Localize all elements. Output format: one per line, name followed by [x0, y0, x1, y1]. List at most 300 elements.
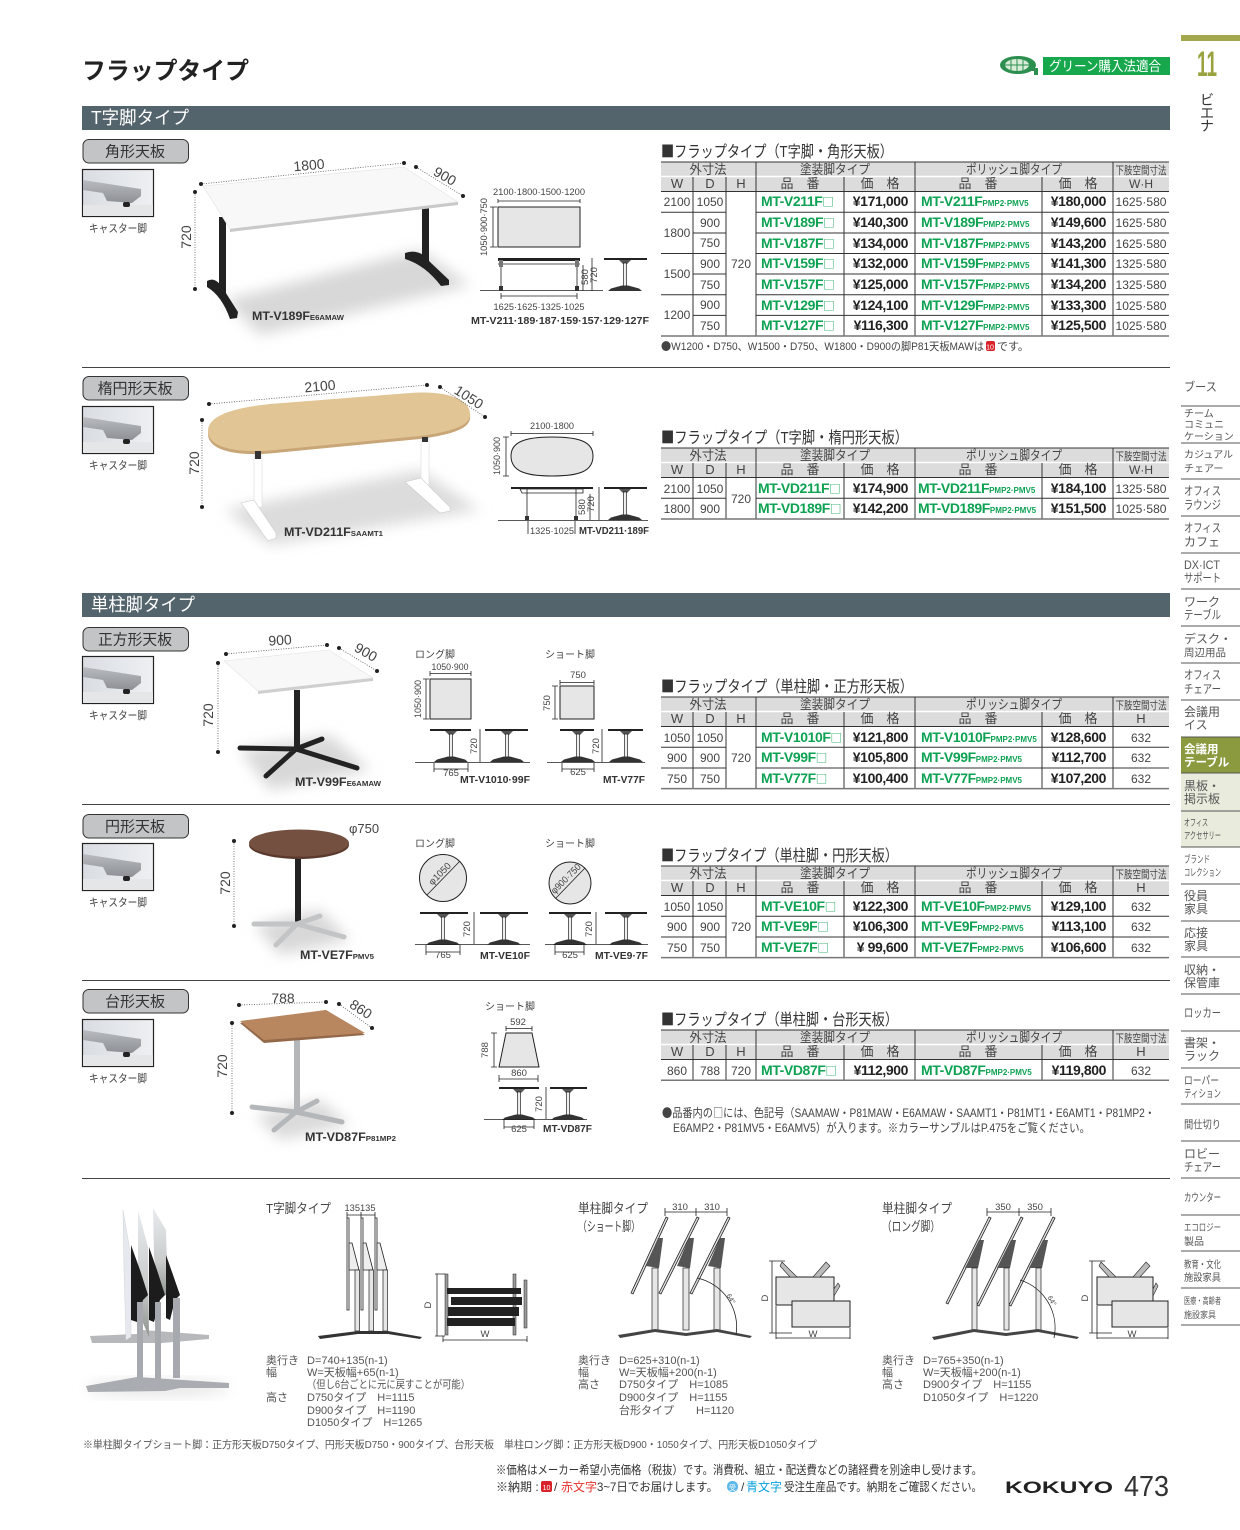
price table: single post square: MT-V1010FPMP2·PMV5 [921, 729, 1037, 745]
product code: MT-VE7F PMV5 [300, 948, 374, 962]
price table: T-leg rectangular: 1625·580 [1116, 237, 1167, 251]
price table: single post round: 品 番 [958, 880, 998, 895]
icon: caster leg thumbnail [82, 844, 154, 909]
price table: T-leg rectangular: 1050 [697, 195, 724, 209]
price table: single post round: ¥106,600 [1051, 939, 1107, 955]
price table: T-leg rectangular: MT-V189F□ [761, 214, 834, 231]
price table: single post round: ¥122,300 [853, 898, 909, 914]
sidebar category navigation [1181, 379, 1240, 1325]
sidebar category navigation: カジュアル [1184, 449, 1233, 461]
technical drawing: square long leg: 720 [469, 738, 480, 754]
icon: caster leg thumbnail [82, 406, 154, 472]
technical drawing: trapezoid short leg: 720 [534, 1096, 545, 1112]
price table: single post square: 価 格 [860, 711, 900, 726]
sidebar category navigation: ロッカー [1184, 1006, 1221, 1020]
stacking specs: T-leg type: W=天板幅+65(n-1) [307, 1365, 399, 1379]
sidebar category navigation: ティション [1184, 1088, 1221, 1100]
dimension: 900 width [224, 631, 329, 656]
technical drawing: trapezoid short leg: 592 [510, 1017, 526, 1028]
sidebar category navigation: チーム [1184, 408, 1214, 420]
dimension: 788: 788 [271, 990, 295, 1006]
section heading: T-leg type: T字脚タイプ [91, 108, 189, 128]
price table: T-leg boat-shaped: W·H [1129, 463, 1153, 477]
price table: T-leg rectangular: 750 [700, 278, 720, 292]
sidebar category navigation: ブランド [1184, 853, 1210, 866]
dimension: 900 width: 900 [268, 631, 292, 649]
chapter index tab: ビ [1200, 92, 1214, 108]
price table: single post round: 750 [700, 941, 720, 955]
price table: T-leg rectangular: ¥149,600 [1051, 214, 1107, 230]
technical drawing: round short leg: 625 [562, 950, 578, 961]
price and delivery notes: ※価格はメーカー希望小売価格（税抜）です。消費税、組立・配送費などの諸経費を別途申し受けます。 [496, 1462, 982, 1477]
shape tag: trapezoid top [83, 990, 188, 1013]
sidebar category navigation: カフェ [1184, 535, 1220, 549]
sidebar category navigation: イス [1184, 718, 1208, 732]
stacking specs: single post long leg: D=765+350(n-1) [923, 1355, 1004, 1367]
price table: T-leg rectangular: MT-V129FPMP2·PMV5 [921, 297, 1030, 313]
price table: T-leg boat-shaped: 1050 [697, 482, 724, 496]
icon: caster leg thumbnail: キャスター脚 [89, 458, 147, 472]
price table: T-leg rectangular: MT-V129F□ [761, 297, 834, 314]
price and delivery notes: 10 [543, 1485, 550, 1492]
price table: T-leg rectangular: ■フラップタイプ（T字脚・角形天板） [661, 138, 893, 162]
price table: single post round: 632 [1131, 900, 1151, 914]
product illustration: MT-VD211F table [186, 377, 487, 545]
sidebar category navigation: 会議用 [1184, 705, 1220, 719]
price table: single post square: 1050 [697, 731, 724, 745]
technical drawing: round long leg: 720 [462, 921, 473, 937]
price table: single post square: ポリッシュ脚タイプ [966, 697, 1062, 712]
price table: T-leg rectangular: 750 [700, 319, 720, 333]
price table: single post round: 632 [1131, 920, 1151, 934]
shape tag: round top [83, 814, 188, 838]
price table: single post square: MT-V99FPMP2·PMV5 [921, 749, 1023, 765]
sidebar category navigation: 応接 [1184, 925, 1208, 940]
dimension: 720: 720 [214, 1054, 230, 1078]
price table: T-leg rectangular: ポリッシュ脚タイプ [966, 162, 1062, 177]
price table: T-leg boat-shaped: ■フラップタイプ（T字脚・楕円形天板） [661, 424, 908, 448]
price and delivery notes: 受 [729, 1483, 736, 1492]
price table: T-leg rectangular: 1325·580 [1116, 278, 1167, 292]
product illustration: MT-VE7F table [217, 821, 379, 962]
shape tag: square top: 正方形天板 [98, 632, 172, 648]
stacking diagram: T-leg type: D [423, 1301, 434, 1308]
price table: T-leg boat-shaped: 1800 [664, 502, 691, 516]
page number: 473 [1124, 1471, 1169, 1503]
price table: T-leg rectangular: MT-V127F□ [761, 317, 834, 334]
price table: T-leg rectangular: MT-V211F□ [761, 193, 834, 210]
sidebar category navigation: 書架・ [1184, 1036, 1220, 1050]
product illustration: MT-V189F table [178, 156, 470, 335]
technical drawing: boat-shaped table: 580 [577, 499, 588, 515]
dimension: 900: 900 [431, 163, 459, 189]
stacking specs: single post short leg: D900タイプ H=1155 [619, 1391, 727, 1404]
sidebar category navigation: チェアー [1184, 463, 1223, 475]
stacking specs: T-leg type: D1050タイプ H=1265 [307, 1416, 422, 1429]
price table: single post round: 1050 [697, 900, 724, 914]
stacking specs: single post long leg: D1050タイプ H=1220 [923, 1391, 1038, 1404]
stacking specs: T-leg type: 奥行き [266, 1353, 299, 1367]
price table: single post trapezoid: 価 格 [860, 1044, 900, 1059]
stacking specs: T-leg type: （但し6台ごとに元に戻すことが可能） [307, 1377, 470, 1391]
dimension: 900 depth [337, 639, 380, 673]
price table: single post round: ¥129,100 [1051, 898, 1107, 914]
price table: T-leg rectangular: ¥141,300 [1051, 255, 1107, 271]
dimension: 720 [214, 1021, 234, 1115]
table footnote: 10 [986, 344, 994, 352]
photo: folded nested tables [86, 1208, 230, 1396]
price table: single post trapezoid: 720 [731, 1064, 751, 1078]
price table: single post round: MT-VE9F□ [761, 918, 828, 935]
price table: single post square: MT-V1010F□ [761, 729, 842, 746]
stacking diagram: T-leg type: W [481, 1329, 490, 1340]
price table: T-leg boat-shaped: 2100 [664, 482, 691, 496]
price table: single post trapezoid: 塗装脚タイプ [800, 1030, 870, 1045]
price table: single post round: ¥113,100 [1052, 918, 1107, 934]
dimension: 720 [186, 418, 204, 509]
technical drawing: square long leg: 1050·900 [413, 680, 424, 718]
sidebar category navigation: 収納・ [1184, 962, 1220, 977]
price table: single post square: H [1136, 711, 1146, 726]
dimension: 1800: 1800 [293, 156, 325, 174]
price table: T-leg rectangular: 900 [700, 257, 720, 271]
technical drawing: round short leg: ショート脚 [545, 837, 595, 850]
stacking diagram: single post short leg: D [760, 1294, 771, 1301]
sidebar category navigation: 会議用 [1184, 742, 1218, 756]
price table: T-leg rectangular: 1325·580 [1116, 257, 1167, 271]
icon: caster leg thumbnail: キャスター脚 [89, 895, 147, 909]
sidebar category navigation: チェアー [1184, 682, 1221, 696]
dimension: 720 [178, 190, 197, 291]
dimension: 2100: 2100 [304, 377, 336, 395]
price table: T-leg boat-shaped: 価 格 [860, 462, 900, 477]
price table: T-leg boat-shaped: H [736, 462, 746, 477]
price table: single post round [661, 842, 1169, 958]
price table: T-leg rectangular: MT-V159F□ [761, 255, 834, 272]
sidebar category navigation: オフィス [1184, 668, 1221, 682]
green purchasing law badge [1000, 56, 1170, 75]
dimension: 1050: 1050 [452, 382, 487, 412]
dimension: 720: 720 [217, 871, 233, 895]
sidebar category navigation: 周辺用品 [1184, 647, 1226, 659]
price table: single post round: ■フラップタイプ（単柱脚・円形天板） [661, 842, 898, 866]
price table: T-leg boat-shaped: 品 番 [780, 462, 820, 477]
table footnote: ●W1200・D750、W1500・D750、W1800・D900の脚P81天板MAWは [661, 338, 984, 354]
stacking specs: single post short leg: D=625+310(n-1) [619, 1355, 700, 1367]
technical drawing: square long leg: MT-V1010·99F [460, 775, 530, 786]
price table: T-leg rectangular: ¥134,000 [853, 235, 909, 251]
price table: T-leg boat-shaped: ¥142,200 [853, 500, 909, 516]
price table: single post trapezoid: 632 [1131, 1064, 1151, 1078]
price table: T-leg rectangular: 1800 [664, 226, 691, 240]
price table: T-leg rectangular: 1025·580 [1116, 319, 1167, 333]
price table: single post square: 外寸法 [690, 697, 726, 712]
stacking specs: single post short leg: 幅 [578, 1366, 589, 1379]
price table: T-leg rectangular: ¥171,000 [853, 193, 909, 209]
sidebar category navigation: 間仕切り [1184, 1118, 1221, 1131]
technical drawing: round long leg: φ1050 [427, 861, 454, 888]
price table: single post round: H [736, 880, 746, 895]
green purchasing law badge: グリーン購入法適合 [1049, 59, 1161, 74]
price table: single post square: W [671, 711, 684, 726]
price table: T-leg rectangular: 720 [731, 257, 751, 271]
price table: single post square: D [705, 711, 715, 726]
price table: single post square: 720 [731, 751, 751, 765]
price table: T-leg rectangular: 1625·580 [1116, 216, 1167, 230]
price and delivery notes: 3~7日でお届けします。 [597, 1480, 718, 1494]
stacking diagram: single post short leg [578, 1201, 850, 1340]
stacking diagram: single post long leg: （ロング脚） [882, 1219, 940, 1234]
chapter index tab: 11 [1197, 45, 1217, 84]
price and delivery notes [496, 1462, 982, 1494]
price table: single post round: ポリッシュ脚タイプ [966, 866, 1062, 881]
dimension: 2100 [207, 377, 429, 406]
dimension: 900 [414, 163, 465, 198]
price table: single post square: 632 [1131, 751, 1151, 765]
price table: single post square: 750 [667, 772, 687, 786]
sidebar category navigation: テーブル [1184, 607, 1221, 622]
technical drawing: round long leg: 765 [435, 950, 451, 961]
price table: single post square: 品 番 [780, 711, 820, 726]
price and delivery notes: 青文字 [746, 1480, 782, 1494]
technical drawing: round long leg: ロング脚 [415, 837, 455, 850]
price table: single post round: MT-VE10F□ [761, 898, 836, 915]
price table: T-leg rectangular: 900 [700, 216, 720, 230]
product code: MT-VD211F SAAMT1 [284, 525, 383, 539]
price table: T-leg rectangular: ¥116,300 [854, 317, 909, 333]
price table: T-leg rectangular: MT-V127FPMP2·PMV5 [921, 317, 1030, 333]
stacking specs: T-leg type [266, 1353, 470, 1429]
price table: single post square: 900 [700, 751, 720, 765]
technical drawing: trapezoid short leg: 788 [480, 1042, 491, 1058]
stacking specs: single post short leg: 台形タイプ H=1120 [619, 1403, 734, 1417]
price table: single post round: 900 [700, 920, 720, 934]
stacking diagram: single post short leg: （ショート脚） [578, 1219, 640, 1234]
dimension: 720: 720 [178, 225, 194, 249]
technical drawing: square short leg [542, 648, 645, 786]
stacking specs: T-leg type: D750タイプ H=1115 [307, 1391, 415, 1404]
price table: single post square: H [736, 711, 746, 726]
technical drawing: rectangular table: 1625·1625·1325·1025 [494, 302, 584, 313]
sidebar category navigation: 掲示板 [1184, 791, 1220, 806]
sidebar category navigation: ケーション [1184, 431, 1234, 443]
stacking specs: T-leg type: D=740+135(n-1) [307, 1355, 388, 1367]
stacking specs: single post short leg: W=天板幅+200(n-1) [619, 1365, 717, 1379]
price table: single post trapezoid: ■フラップタイプ（単柱脚・台形天板） [661, 1006, 898, 1030]
price table: T-leg boat-shaped: 1025·580 [1116, 502, 1167, 516]
shape tag: rectangular top [83, 140, 188, 163]
price table: single post round: D [705, 880, 715, 895]
stacking specs: single post short leg [578, 1353, 734, 1417]
price table: single post trapezoid: H [736, 1044, 746, 1059]
price table: T-leg rectangular: 価 格 [1058, 176, 1098, 191]
shape tag: round top: 円形天板 [105, 818, 165, 836]
price table: single post round: 価 格 [1058, 880, 1098, 895]
dimension: 720 [200, 661, 220, 754]
price table: single post square: ¥112,700 [1052, 749, 1107, 765]
dimension: diameter 750: φ750 [349, 821, 379, 836]
price table: T-leg rectangular: H [736, 176, 746, 191]
technical drawing: round short leg: 720 [584, 921, 595, 937]
technical drawing: trapezoid short leg: 625 [511, 1124, 527, 1135]
price table: T-leg rectangular: MT-V157F□ [761, 276, 834, 293]
stacking specs: single post long leg: 幅 [882, 1366, 893, 1379]
icon: caster leg thumbnail [82, 656, 154, 722]
price table: single post square: MT-V77FPMP2·PMV5 [921, 770, 1023, 786]
sidebar category navigation: DX·ICT [1184, 558, 1221, 572]
price table: single post trapezoid: H [1136, 1044, 1146, 1059]
sidebar category navigation: 家具 [1184, 939, 1208, 953]
icon: caster leg thumbnail: キャスター脚 [89, 1071, 147, 1085]
dimension: 860: 860 [347, 996, 375, 1022]
stacking specs: single post short leg: 奥行き [578, 1353, 611, 1367]
technical drawing: rectangular table: MT-V211·189·187·159·157·129·127F [471, 316, 649, 327]
price table: single post trapezoid: 860 [667, 1064, 687, 1078]
stacking diagram: single post long leg: 350 [995, 1202, 1011, 1213]
sidebar category navigation: デスク・ [1184, 631, 1232, 646]
technical drawing: round long leg: MT-VE10F [480, 951, 530, 962]
sidebar category navigation: 医療・高齢者 [1184, 1295, 1221, 1306]
shape tag: square top [83, 628, 188, 651]
price table: T-leg rectangular: 1200 [664, 308, 691, 322]
technical drawing: square short leg: 720 [591, 738, 602, 754]
brand logo: KOKUYO [1005, 1478, 1113, 1497]
price table: single post round: ¥106,300 [853, 918, 909, 934]
price table: T-leg rectangular: 下肢空間寸法 [1116, 163, 1166, 177]
price table: T-leg rectangular: D [705, 176, 715, 191]
product illustration: MT-V99F table [200, 631, 382, 790]
price table: T-leg rectangular: 品 番 [958, 176, 998, 191]
price table: single post square: 塗装脚タイプ [800, 697, 870, 712]
price table: single post round: MT-VE7FPMP2·PMV5 [921, 939, 1024, 955]
price table: T-leg boat-shaped: MT-VD211FPMP2·PMV5 [918, 480, 1036, 496]
sidebar category navigation: ブース [1184, 379, 1217, 394]
stacking specs: single post short leg: 高さ [578, 1377, 600, 1391]
price table: single post square: 632 [1131, 731, 1151, 745]
sidebar category navigation: チェアー [1184, 1160, 1221, 1174]
price table: single post square: ¥107,200 [1051, 770, 1107, 786]
sidebar category navigation: 役員 [1184, 888, 1208, 903]
price table: single post trapezoid: MT-VD87F□ [761, 1062, 837, 1079]
price table: T-leg rectangular: 1625·580 [1116, 195, 1167, 209]
price table: T-leg boat-shaped: 1325·580 [1116, 482, 1167, 496]
price table: T-leg boat-shaped: 720 [731, 492, 751, 506]
section heading: T-leg type [82, 106, 1170, 130]
icon: caster leg thumbnail: キャスター脚 [89, 708, 147, 722]
sidebar category navigation: 黒板・ [1184, 779, 1220, 793]
sidebar category navigation: ラック [1184, 1049, 1220, 1063]
technical drawing: square short leg: MT-V77F [603, 775, 645, 786]
technical drawing: square long leg: 765 [443, 768, 459, 779]
price table: T-leg boat-shaped: W [671, 462, 684, 477]
price table: T-leg rectangular [661, 138, 1169, 336]
sidebar category navigation: 教育・文化 [1184, 1258, 1221, 1271]
technical drawing: trapezoid short leg [480, 1000, 592, 1135]
product code: MT-V189F E6AMAW [252, 309, 345, 323]
price table: T-leg boat-shaped: ¥184,100 [1051, 480, 1107, 496]
price table: T-leg rectangular: MT-V211FPMP2·PMV5 [921, 193, 1029, 209]
sidebar category navigation: 施設家具 [1184, 1271, 1221, 1284]
technical drawing: trapezoid short leg: MT-VD87F [543, 1124, 592, 1135]
price table: single post trapezoid: ¥112,900 [854, 1062, 909, 1078]
colour code note: E6AMP2・P81MV5・E6AMV5）が入ります。※カラーサンプルはP.475をご覧ください。 [673, 1120, 1090, 1135]
stacking specs: single post long leg: D900タイプ H=1155 [923, 1378, 1031, 1391]
sidebar category navigation: ラウンジ [1184, 498, 1221, 512]
sidebar category navigation: エコロジー [1184, 1223, 1221, 1234]
price table: T-leg rectangular: 2100 [664, 195, 691, 209]
page title: フラップタイプ [82, 58, 249, 85]
stacking diagram: T-leg type: 135135 [344, 1203, 376, 1214]
price table: T-leg boat-shaped: ポリッシュ脚タイプ [966, 448, 1062, 463]
price table: single post round: 632 [1131, 941, 1151, 955]
stacking specs: single post long leg [882, 1353, 1038, 1404]
product code: MT-VD87F P81MP2 [305, 1130, 396, 1144]
price table: T-leg boat-shaped: D [705, 462, 715, 477]
price table: single post round: 1050 [664, 900, 691, 914]
price table: T-leg boat-shaped [661, 424, 1169, 519]
technical drawing: rectangular table: 2100·1800·1500·1200 [493, 187, 585, 198]
shape tag: boat-shaped top [83, 376, 188, 400]
stacking specs: single post long leg: 奥行き [882, 1353, 915, 1367]
price table: T-leg rectangular: MT-V159FPMP2·PMV5 [921, 255, 1030, 271]
sidebar category navigation: ワーク [1184, 595, 1220, 609]
price table: single post round: W [671, 880, 684, 895]
sidebar category navigation: アクセサリー [1184, 831, 1221, 842]
price table: single post square: MT-V77F□ [761, 770, 827, 787]
technical drawing: rectangular table: 1050·900·750 [479, 198, 490, 256]
price table: single post round: ¥ 99,600 [857, 939, 909, 955]
stacking diagram: single post short leg: W [809, 1329, 818, 1340]
icon: caster leg thumbnail [82, 170, 154, 235]
price and delivery notes: / [554, 1480, 558, 1494]
price table: single post round: 900 [667, 920, 687, 934]
price table: T-leg rectangular: ¥143,200 [1051, 235, 1107, 251]
price table: T-leg rectangular: W·H [1129, 177, 1153, 191]
price table: T-leg boat-shaped: 品 番 [958, 462, 998, 477]
price table: single post square: 品 番 [958, 711, 998, 726]
sidebar category navigation: オフィス [1184, 521, 1221, 535]
stacking diagram: single post long leg: W [1128, 1329, 1137, 1340]
stacking diagram: single post long leg [882, 1201, 1168, 1340]
price table: single post round: MT-VE9FPMP2·PMV5 [921, 918, 1024, 934]
sidebar category navigation: ローパー [1184, 1074, 1219, 1087]
sidebar category navigation: 施設家具 [1184, 1309, 1216, 1320]
technical drawing: round short leg [545, 837, 648, 962]
chapter index tab [1181, 35, 1240, 134]
technical drawing: boat-shaped table: MT-VD211·189F [579, 526, 649, 537]
shape tag: boat-shaped top: 楕円形天板 [98, 380, 172, 398]
price table: T-leg boat-shaped: ¥151,500 [1051, 500, 1107, 516]
technical drawing: round long leg [415, 837, 530, 962]
price table: single post trapezoid: ¥119,800 [1052, 1062, 1107, 1078]
technical drawing: square long leg: 1050·900 [432, 662, 468, 673]
stacking diagram: T-leg type [266, 1201, 527, 1342]
price table: single post trapezoid: 外寸法 [690, 1030, 726, 1045]
price table: single post trapezoid: 品 番 [958, 1044, 998, 1059]
price table: T-leg rectangular: 価 格 [860, 176, 900, 191]
price table: single post square: 632 [1131, 772, 1151, 786]
stacking diagram: T-leg type: T字脚タイプ [266, 1201, 331, 1216]
dimension: 720: 720 [200, 703, 216, 727]
price table: single post trapezoid: 品 番 [780, 1044, 820, 1059]
price table: T-leg rectangular: ¥133,300 [1051, 297, 1107, 313]
price table: T-leg rectangular: MT-V187FPMP2·PMV5 [921, 235, 1030, 251]
price table: single post square: ¥105,800 [853, 749, 909, 765]
price table: single post trapezoid [661, 1006, 1169, 1080]
price table: single post trapezoid: W [671, 1044, 684, 1059]
price table: single post square: 価 格 [1058, 711, 1098, 726]
technical drawing: rectangular table: 580 [580, 269, 591, 285]
